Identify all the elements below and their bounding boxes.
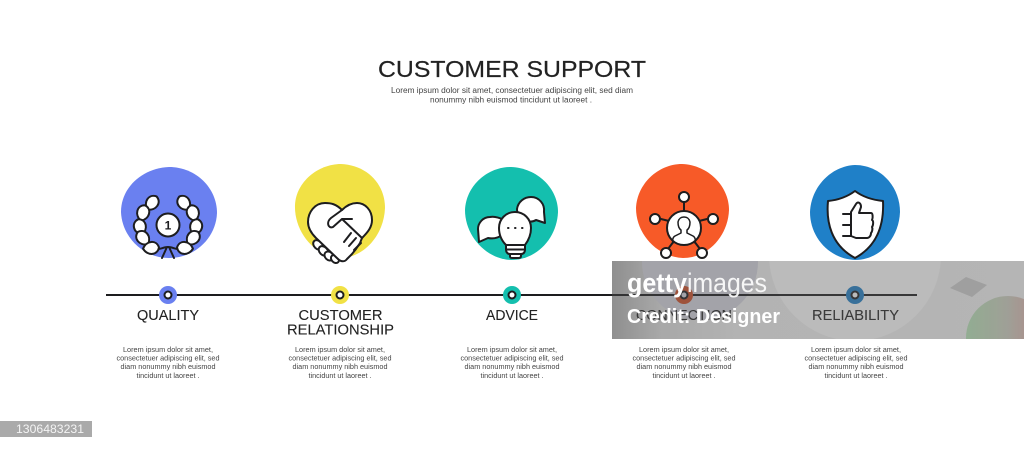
body text: quality: Lorem ipsum dolor sit amet, — [123, 347, 213, 354]
body text: customer relationship: diam nonummy nibh euismod — [292, 364, 388, 371]
label: customer relationship — [287, 307, 394, 338]
body text: advice: diam nonummy nibh euismod — [464, 364, 560, 371]
body text: customer relationship — [288, 347, 392, 380]
node: connection — [675, 286, 693, 304]
label: customer relationship: RELATIONSHIP — [287, 322, 394, 338]
watermark: getty images logo: images — [687, 268, 767, 298]
body text: connection: tincidunt ut laoreet . — [652, 373, 716, 380]
blob: connection — [636, 164, 729, 258]
watermark: getty images logo — [627, 268, 767, 298]
subtitle text: nonummy nibh euismod tincidunt ut laoreet . — [430, 96, 592, 104]
subtitle text: Lorem ipsum dolor sit amet, consectetuer adipiscing elit, sed diam — [391, 86, 633, 95]
body text: reliability: Lorem ipsum dolor sit amet, — [811, 347, 901, 354]
icon: lightbulb with speech bubbles — [478, 197, 545, 258]
body text: advice: Lorem ipsum dolor sit amet, — [467, 347, 557, 354]
label: reliability: RELIABILITY — [812, 307, 899, 324]
timeline — [106, 286, 917, 304]
body text: customer relationship: Lorem ipsum dolor sit amet, — [295, 347, 385, 354]
watermark: getty images logo: getty — [627, 268, 687, 298]
body text: customer relationship: consectetuer adipiscing elit, sed — [288, 356, 392, 362]
body text: quality — [116, 347, 220, 380]
body text: quality: diam nonummy nibh euismod — [120, 364, 216, 371]
body text: connection: diam nonummy nibh euismod — [636, 364, 732, 371]
body text: connection: Lorem ipsum dolor sit amet, — [639, 347, 729, 354]
title: CUSTOMER SUPPORT — [378, 56, 646, 82]
body text: reliability: tincidunt ut laoreet . — [824, 373, 888, 380]
image id tag — [0, 421, 92, 437]
icon: handshake heart — [308, 203, 372, 265]
node: advice — [503, 286, 521, 304]
blob: advice — [465, 167, 558, 260]
node: reliability — [846, 286, 864, 304]
body text: quality: tincidunt ut laoreet . — [136, 373, 200, 380]
blob: quality — [121, 167, 217, 258]
body text: advice: tincidunt ut laoreet . — [480, 373, 544, 380]
body text: advice: consectetuer adipiscing elit, sed — [460, 356, 564, 362]
body text: reliability — [804, 347, 908, 380]
icon: person network — [650, 192, 718, 258]
icon: shield with thumbs up — [828, 191, 883, 258]
watermark: credit line: Credit: Designer — [627, 306, 780, 328]
body text: connection — [632, 347, 736, 380]
body text: connection: consectetuer adipiscing elit, sed — [632, 356, 736, 362]
label: connection: CONNECTION — [636, 307, 732, 324]
icon: laurel medal — [132, 193, 204, 258]
label: customer relationship: CUSTOMER — [298, 307, 383, 324]
body text: advice — [460, 347, 564, 380]
body text: reliability: consectetuer adipiscing elit, sed — [804, 356, 908, 362]
image id tag: 1306483231 — [16, 422, 84, 436]
blob: customer relationship — [295, 164, 385, 258]
icon: laurel medal: 1 — [165, 218, 172, 232]
label: quality: QUALITY — [137, 307, 199, 324]
body text: reliability: diam nonummy nibh euismod — [808, 364, 904, 371]
body text: customer relationship: tincidunt ut laoreet . — [308, 373, 372, 380]
label: advice: ADVICE — [486, 307, 538, 324]
node: customer relationship — [331, 286, 349, 304]
watermark haze — [612, 261, 1024, 339]
node: quality — [159, 286, 177, 304]
body text: quality: consectetuer adipiscing elit, sed — [116, 356, 220, 362]
watermark panel — [612, 261, 1024, 339]
blob: reliability — [810, 165, 900, 260]
subtitle text — [391, 86, 633, 104]
